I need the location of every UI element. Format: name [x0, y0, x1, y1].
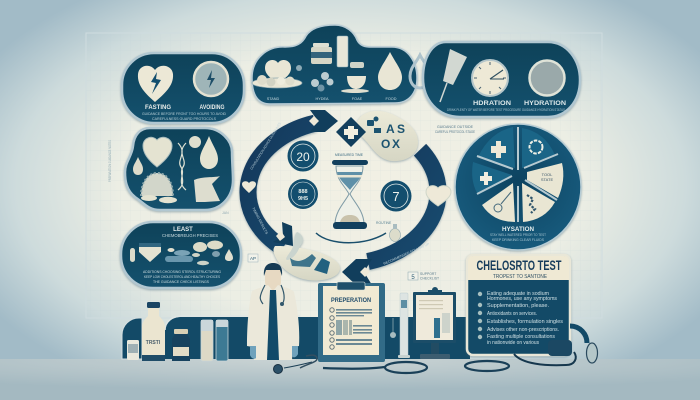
checklist: [330, 308, 372, 349]
blob: top right: [356, 111, 418, 161]
bullet list: Establishes, formulation singles: [487, 319, 563, 325]
icons and letters: [367, 116, 405, 151]
icon: small drop: [133, 157, 143, 175]
figures: [286, 232, 330, 274]
icon: test tube: [440, 49, 467, 102]
clipboard: preparation: [318, 282, 385, 362]
markers: diamonds and hearts: [242, 116, 451, 277]
timer: hours: 888: [298, 189, 308, 195]
separators: [477, 127, 558, 222]
icon: heart: [143, 137, 172, 167]
icons and letters: O: [381, 137, 390, 151]
note above pie: [435, 125, 475, 134]
back band: [122, 316, 470, 359]
panel: hydration: [423, 42, 580, 117]
arrow: bottom: [342, 259, 372, 285]
arc: right: [368, 150, 438, 262]
bullet list: [487, 291, 563, 346]
icon: cup: [341, 62, 369, 93]
arrow: lower left: [273, 222, 293, 246]
panel: cholesterol test: [467, 255, 570, 355]
description: [143, 269, 221, 284]
icon: glass: [337, 36, 348, 67]
description: KEEP LOW CHOLESTEROL AND HEALTHY CHOICES: [144, 274, 220, 279]
description: STAY WELL WATERED PRIOR TO TEST: [490, 233, 547, 237]
arc captions: TIMING RESULTS: [251, 207, 269, 236]
timer: hours: [288, 179, 318, 209]
wedge: lower left: [482, 183, 515, 222]
icon: link drop: [410, 55, 430, 88]
label: fasting: FASTING: [145, 105, 171, 111]
panel: food and water: [252, 25, 417, 104]
icon: shield: [139, 243, 161, 262]
labels: HYDEA: [315, 97, 329, 101]
arc: left: [248, 123, 315, 248]
wedge: lower right: [522, 183, 555, 222]
labels: STAND: [267, 97, 280, 101]
panel: fasting and avoiding: [122, 53, 244, 123]
icon: water drop: [378, 52, 402, 90]
description: ADDITIONS CHOOSING STEROL STRUCTURING: [143, 269, 221, 274]
wedge: right: STATE: [541, 177, 553, 182]
label: hydration left: HDRATION: [473, 100, 511, 107]
description: KEEP DRINKING CLEAR FLUIDS: [492, 238, 545, 242]
side notes left: PREPARATION GUIDANCE NOTES: [108, 140, 112, 182]
stethoscope: right: [514, 326, 598, 365]
timer: 7: 7: [392, 189, 400, 204]
label: TRSTI: [146, 340, 161, 346]
small bottle icon: ROUTINE: [376, 221, 392, 225]
wedge: top left: [478, 127, 515, 168]
description: GUIDANCE BEFORE FRONT TOO HOURS TO AVOID: [142, 112, 226, 116]
small bottle: [127, 340, 139, 360]
arc captions: RECOMMENDED FOLLOW UP: [383, 242, 431, 266]
cycle diagram: [242, 110, 451, 285]
icon: plus diamond: [336, 117, 366, 147]
subheading: CHEMOBREUGH PRECISES: [162, 233, 218, 238]
labels: [267, 97, 397, 101]
icon: molecule balls: [296, 65, 334, 92]
bottle: test: [142, 302, 165, 361]
icon: cream shape: [194, 176, 220, 202]
icon: jar: [311, 43, 332, 64]
pie chart: hydration: [455, 124, 581, 250]
jar: [172, 329, 190, 361]
icons and letters: S: [397, 122, 405, 136]
bullet list: Antioxidants on services.: [487, 311, 537, 317]
note: small badge right: CHECKLIST: [420, 276, 439, 280]
hourglass: MEASURED TIME: [335, 153, 363, 157]
icon: gauge: [194, 62, 228, 96]
wedge: right: TOOL: [542, 172, 553, 177]
title: PREPERATION: [331, 298, 371, 304]
arrow: top: [310, 110, 338, 132]
subtitle: TROPEST TO SANTONE: [493, 274, 547, 280]
icons and letters: X: [392, 137, 400, 151]
pendulum line: [390, 318, 396, 338]
note above pie: CAREFUL PROTOCOL STAGE: [435, 130, 475, 134]
note: small badge right: SUPPORT: [420, 272, 436, 276]
floor: [0, 359, 700, 400]
label: avoiding: AVOIDING: [200, 105, 225, 111]
caption arcs under hourglass: [316, 233, 386, 243]
bullet list: Fasting multiple consultations: [487, 334, 555, 340]
note: small badge right: [408, 272, 439, 281]
icon: pill pile: [141, 173, 177, 203]
bullet list: in nationwide on various: [487, 340, 539, 346]
stethoscope: floor left: [274, 362, 312, 374]
arc captions: CONSULTATION ADVICE GUIDELINES: [249, 121, 282, 171]
bullet list: Supplementation, please.: [487, 303, 549, 309]
note: small badge left: [248, 254, 258, 262]
bullets: [478, 292, 482, 339]
icon: broken heart: [138, 66, 173, 102]
side notes left: [108, 140, 229, 215]
note: small badge right: 5: [411, 275, 415, 281]
timer: 20: 20: [296, 150, 310, 164]
note: small badge left: AP: [250, 256, 256, 261]
bullet list: Hormones, use any symptoms: [487, 296, 557, 302]
icon: plate with heart: [252, 60, 302, 88]
icon: clock: [472, 60, 508, 96]
monitor: [413, 287, 456, 359]
small bottle icon: [376, 221, 400, 242]
blob: bottom left: [273, 232, 340, 280]
icon: grey disk: [530, 60, 564, 96]
title: CHELOSRTO TEST: [476, 257, 562, 273]
description: [142, 112, 226, 121]
test tubes: [201, 320, 228, 361]
bullet list: Eating adequate in sodium: [487, 291, 549, 297]
icon: dna helix: [178, 143, 186, 190]
labels: FOAE: [352, 97, 363, 101]
timer: 20: [288, 141, 318, 171]
label: hydration: HYSATION: [502, 227, 534, 233]
panel: least cholesterol: [121, 222, 241, 288]
side notes left: JAN: [222, 211, 229, 215]
wedge: left: [472, 162, 512, 193]
description: THE GUIDANCE CHECK LISTINGS: [153, 279, 209, 284]
icons and letters: A: [386, 122, 395, 136]
icon: big drop: [200, 136, 218, 169]
timer: hours: 9H5: [298, 196, 308, 202]
description: [490, 233, 547, 242]
labels: FOOD: [386, 97, 397, 101]
description: DRINK PLENTY OF WATER BEFORE TEST PROCEDURE GUIDANCE HYDRATION STATUS: [447, 108, 566, 112]
wedge: top right: [522, 128, 555, 168]
wedge: right: [527, 163, 563, 198]
heading: least: LEAST: [173, 227, 193, 233]
icon: ball: [189, 136, 201, 148]
arc captions: [249, 121, 431, 266]
bullet list: Advises other non-prescriptions.: [487, 327, 559, 333]
icon: pills: [130, 240, 233, 265]
note above pie: GUIDANCE OUTSIDE: [437, 125, 473, 129]
timer: 7: [380, 180, 412, 212]
doctor: [247, 263, 299, 360]
panel: heart and dna: [125, 128, 233, 210]
floor cables: [300, 355, 509, 373]
hourglass: [332, 153, 368, 229]
description: CAREFULNESS GUARD PROTOCOLS: [152, 117, 217, 121]
test tube: tall: [398, 293, 410, 358]
label: hydration right: HYDRATION: [524, 100, 566, 107]
